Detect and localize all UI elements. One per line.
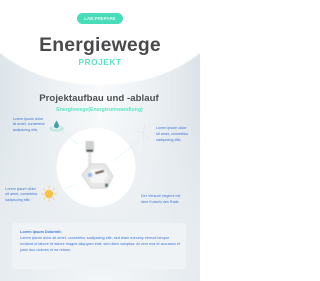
badge: LAB:PREPARE [77, 12, 123, 24]
notes body: invidunt ut labore et dolore magna aliquyam erat, sed diam voluptua. At vero eos et accusam et [20, 242, 180, 246]
section subheading: Energiewege(Energieumwandlung) [56, 106, 143, 112]
central diagram [56, 128, 138, 207]
text: sun: Lorem ipsum dolor [5, 186, 36, 190]
section heading: Projektaufbau und -ablauf [39, 93, 159, 104]
connector: sun [64, 185, 74, 189]
circle backdrop [56, 128, 136, 207]
text: water: sadipscing elitr, [13, 128, 38, 132]
text: experiment start [141, 194, 180, 204]
text: wind: sadipscing elitr, [156, 138, 181, 142]
notes body: justo duo dolores et ea rebum. [20, 248, 71, 252]
text: water: sit amet, consetetur [13, 122, 45, 126]
text: wind: Lorem ipsum dolor [156, 126, 187, 130]
text: experiment start: Der Versuch beginnt mit [141, 194, 180, 198]
notes body [20, 236, 180, 252]
connector: wind [114, 141, 138, 160]
text: wind: sit amet, consetetur [156, 132, 188, 136]
icon: sun [41, 186, 57, 202]
title: Energiewege [39, 34, 161, 56]
text: water: Lorem ipsum dolor [13, 116, 43, 120]
icon: wind turbine [137, 124, 150, 144]
notes heading: Lorem Ipsum Dolormit: [20, 230, 62, 234]
text: experiment start: dem Kurbeln des Rads [141, 200, 179, 204]
apparatus [82, 141, 113, 188]
badge: LAB:PREPARE: LAB:PREPARE [84, 16, 116, 20]
text: sun: sadipscing elitr, [5, 198, 31, 202]
subtitle: PROJEKT [78, 56, 122, 66]
text: sun: sit amet, consetetur [5, 192, 37, 196]
background [0, 52, 200, 281]
text: sun [5, 186, 38, 202]
text: water [12, 116, 45, 132]
text: wind [156, 126, 188, 142]
connector: water [62, 131, 78, 144]
notes body: Lorem ipsum dolor sit amet, consetetur sadipscing elitr, sed diam nonumy eirmod tempor [20, 236, 169, 240]
panel: notes [12, 223, 186, 269]
icon: water drop [49, 120, 64, 132]
